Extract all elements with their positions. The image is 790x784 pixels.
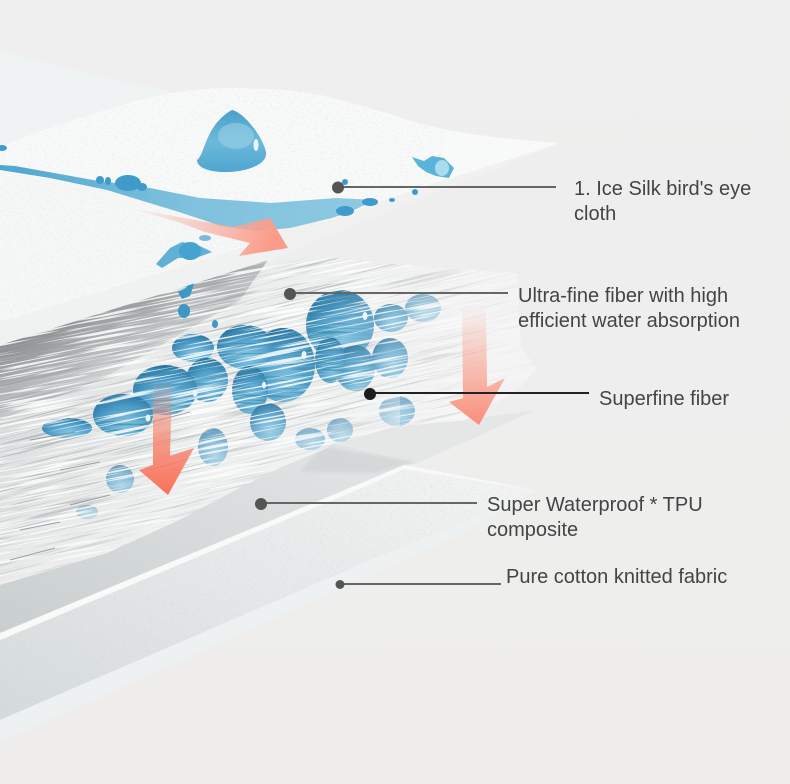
panel: layer 4 pure cotton knitted fabric	[0, 494, 445, 720]
panel: back sheet	[0, 50, 171, 147]
big water drop	[197, 110, 266, 172]
label 4: composite	[487, 519, 578, 541]
panel: layer 3 super waterproof TPU composite	[0, 410, 536, 640]
dot 3	[364, 388, 376, 400]
dot 5	[336, 580, 344, 589]
dot 1	[332, 182, 344, 194]
water spheres	[42, 290, 441, 519]
arrow: top sheet to fibre	[125, 207, 288, 256]
label 1: cloth	[574, 203, 616, 225]
leader line 2	[290, 292, 508, 294]
panel: layer 1 ice silk bird's eye cloth	[0, 88, 558, 345]
cotton highlight ridge	[0, 465, 536, 640]
fibre lightening bottom	[0, 380, 400, 600]
lower front strip	[257, 143, 560, 260]
leader line 3	[370, 392, 589, 394]
fibre lightening right	[340, 264, 535, 432]
white fibre streaks over spheres	[0, 258, 520, 583]
fibre dark shading	[0, 260, 268, 420]
arrow: fibre right downward	[449, 305, 505, 425]
callout: ultra-fine fiber	[284, 285, 740, 332]
sphere highlights	[146, 312, 368, 422]
label 5: Pure cotton knitted fabric	[506, 566, 727, 588]
callout: superfine fiber	[364, 388, 729, 410]
droplets splash under sheet	[156, 235, 212, 268]
callout: TPU composite	[255, 494, 703, 541]
stream droplets	[0, 145, 418, 216]
TPU shadow under fibre	[300, 446, 415, 473]
label 1: 1. Ice Silk bird's eye	[574, 178, 751, 200]
label 2: efficient water absorption	[518, 310, 740, 332]
panel: layer 2 fibre block	[0, 258, 531, 585]
TPU right flap	[339, 410, 536, 463]
fibre dark lines lower left	[10, 412, 190, 560]
front sheet lower edge	[0, 240, 290, 345]
dot 4	[255, 498, 267, 510]
callout: ice silk	[332, 178, 751, 225]
small cluster droplet right	[412, 156, 454, 178]
label 4: Super Waterproof * TPU	[487, 494, 703, 516]
dark blue streaks in spheres	[94, 294, 374, 433]
cotton lower strip	[0, 490, 536, 742]
water stream	[0, 165, 375, 231]
arrow: fibre left downward	[139, 383, 194, 495]
cotton weave area	[0, 468, 536, 720]
fibre base	[0, 257, 536, 585]
leader line 5	[340, 583, 501, 585]
main upper sheet	[0, 88, 560, 232]
leader line 1	[338, 186, 556, 188]
dot 2	[284, 288, 296, 300]
label 2: Ultra-fine fiber with high	[518, 285, 728, 307]
cotton sheet outline	[0, 465, 536, 742]
TPU main surface	[0, 444, 418, 635]
label 3: Superfine fiber	[599, 388, 729, 410]
dark fibre streaks	[0, 258, 534, 574]
front left sheet	[0, 172, 290, 345]
leader line 4	[261, 502, 477, 504]
small falling droplets	[178, 278, 218, 328]
sphere cluster	[405, 294, 441, 322]
callout: cotton	[336, 566, 727, 589]
